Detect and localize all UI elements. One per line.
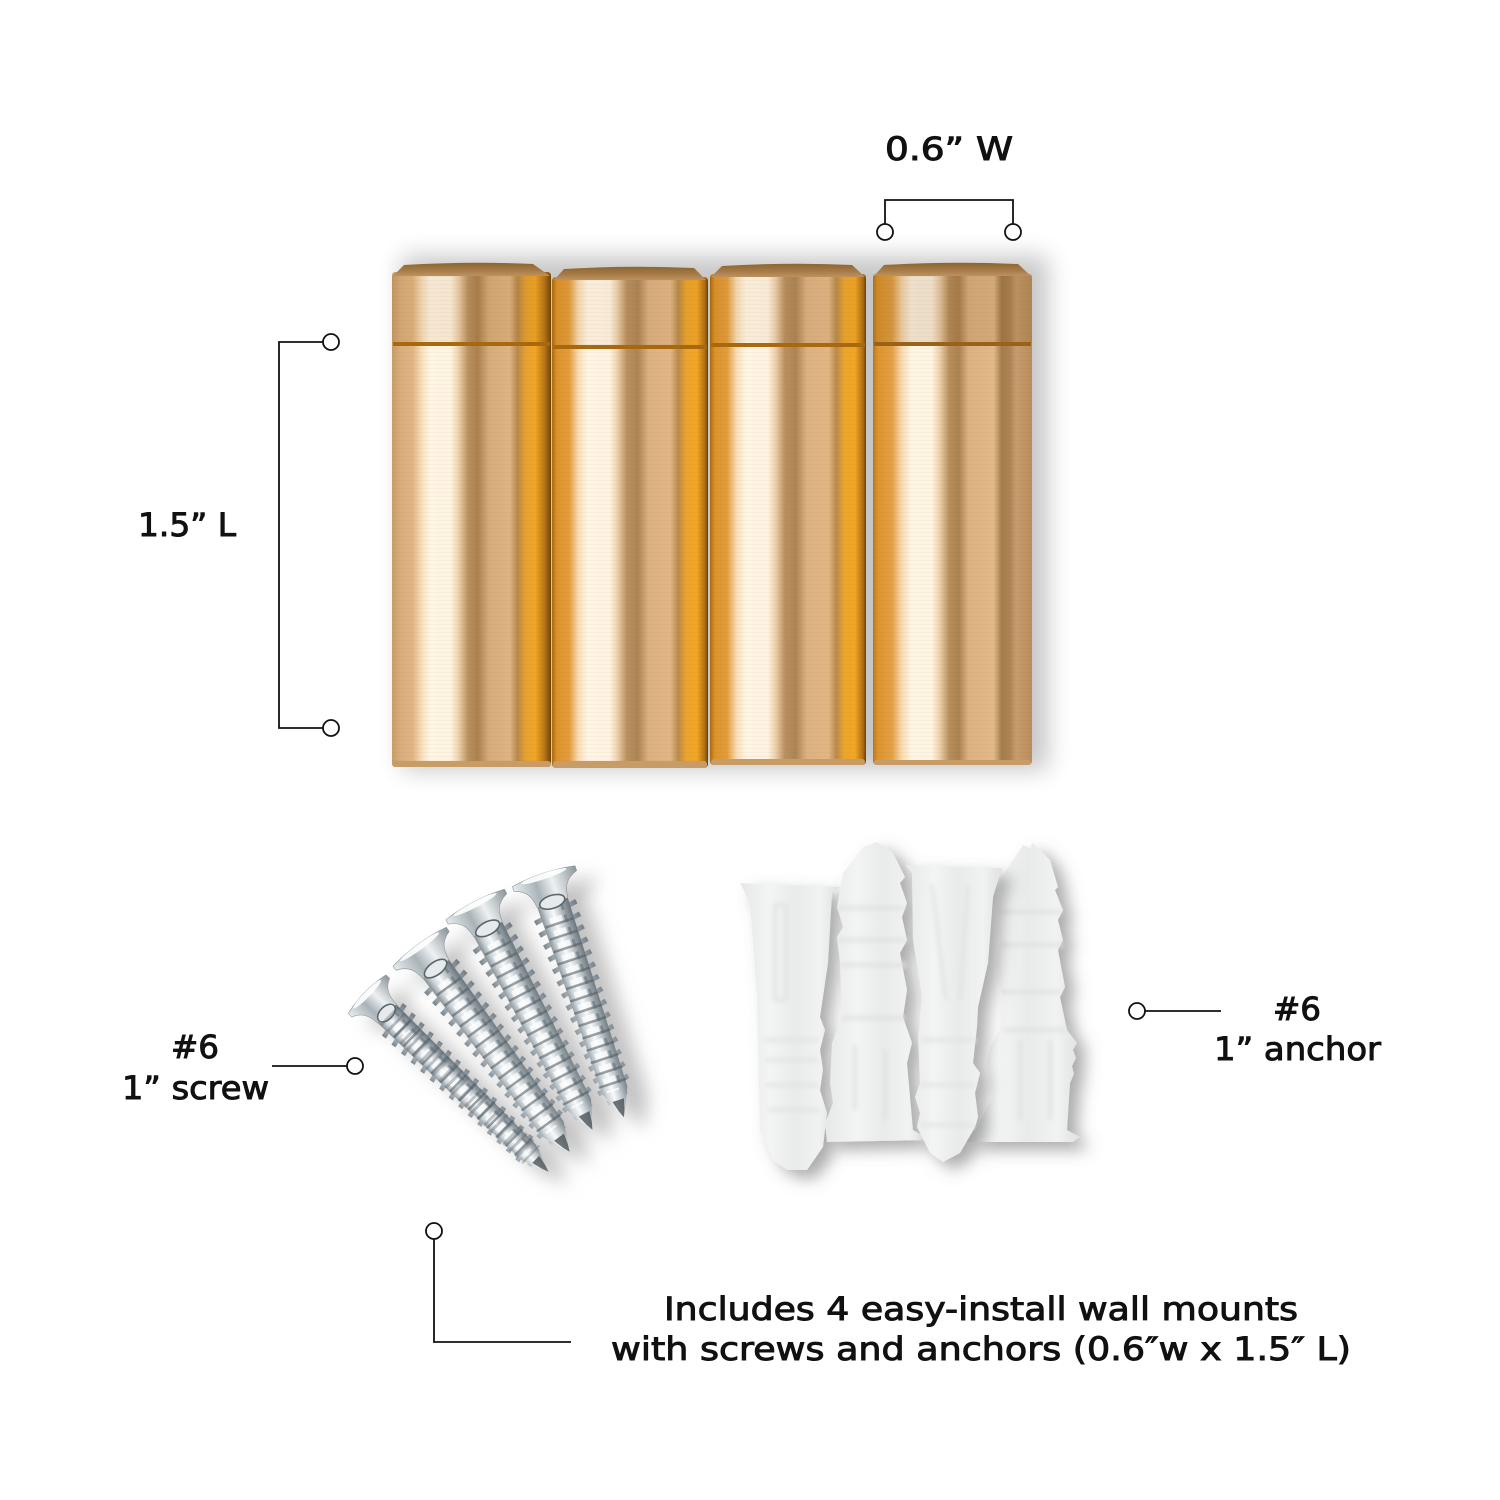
screw label [122,1028,269,1107]
contents text: with screws and anchors (0.6″w x 1.5″ L) [611,1330,1351,1368]
screw 1 [346,973,568,1191]
width dimension bracket [877,200,1021,240]
length label: 1.5” L [138,506,236,544]
callout: screw size [122,1028,363,1107]
anchor 1: tube with flange [740,883,840,1170]
screw 3 [444,887,622,1145]
anchor 4: barbed, right [965,843,1080,1142]
anchor 2: barbed, left [825,842,930,1142]
callout: kit contents [426,1223,1351,1368]
screw label: 1” screw [122,1069,269,1107]
width label: 0.6” W [885,130,1013,168]
screw label: #6 [171,1028,219,1066]
screw 4 [511,863,655,1128]
cylinder 3 [710,264,866,765]
product group: four screws [346,863,675,1203]
callout: anchor size [1129,990,1382,1068]
screw 2 [391,925,596,1171]
cylinder 2 [552,267,708,768]
anchor label [1214,990,1382,1068]
contents leader line [426,1223,571,1342]
anchor label: #6 [1273,990,1321,1028]
cylinder 4 [873,263,1032,765]
anchor leader line [1129,1003,1221,1019]
screw leader line [272,1058,363,1074]
contents text: Includes 4 easy-install wall mounts [664,1290,1298,1328]
length dimension bracket [279,334,339,736]
anchor 3: tube, pointed end down [905,865,1002,1162]
product group: four gold wall mount cylinders [392,256,1048,770]
cylinder 1 [392,263,551,767]
anchor label: 1” anchor [1214,1030,1382,1068]
product group: four plastic anchors [740,842,1080,1170]
contents text [611,1290,1351,1368]
